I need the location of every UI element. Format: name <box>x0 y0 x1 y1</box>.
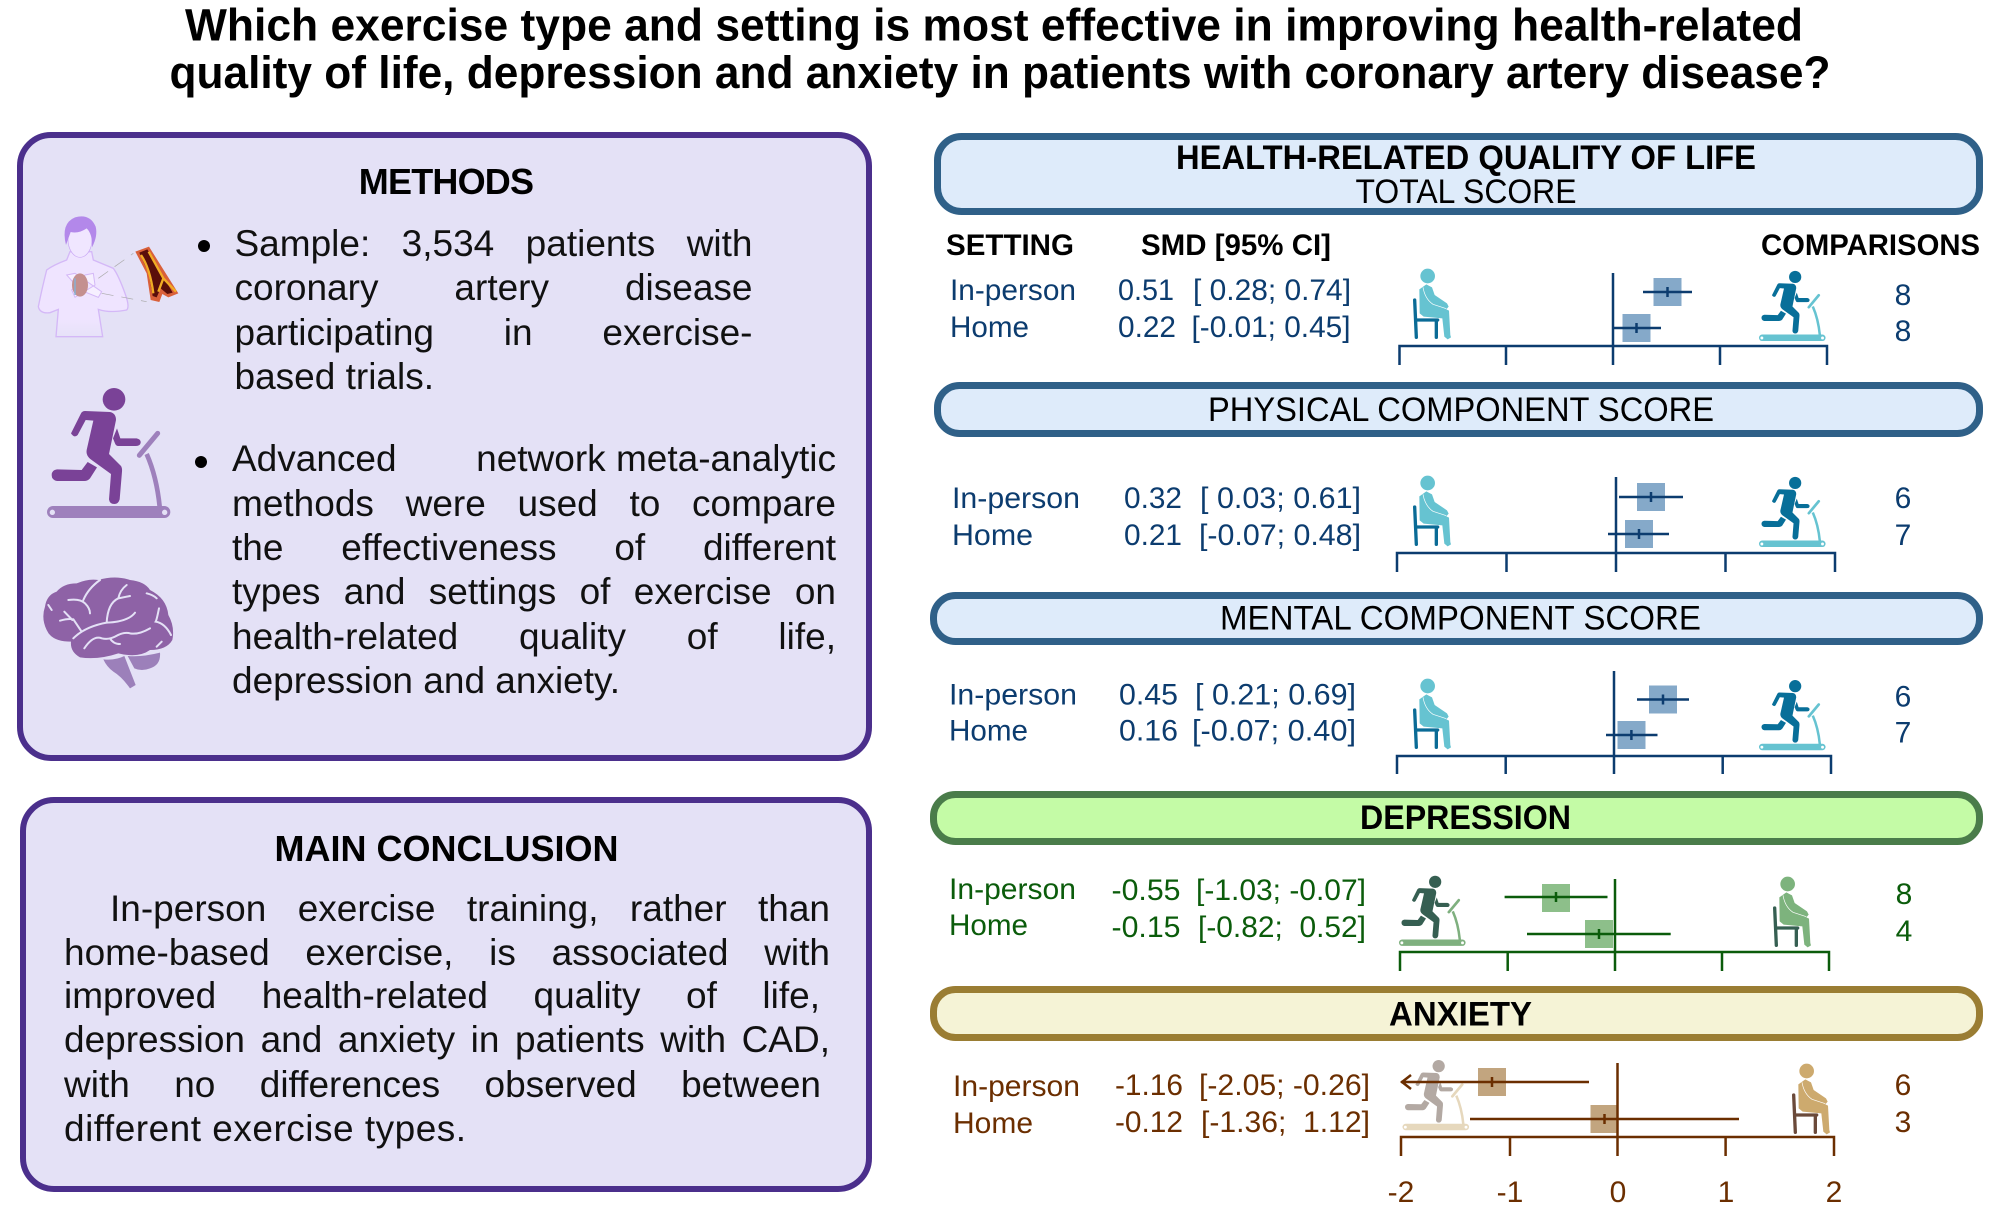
data rows: In-person <box>952 482 1080 515</box>
data rows: [ 0.21; 0.69] <box>1195 678 1356 712</box>
methods heading: METHODS <box>359 160 533 202</box>
header: health-related quality of life <box>938 136 1980 212</box>
bullet marker 2 <box>195 456 207 468</box>
data rows: -0.55 <box>1112 874 1180 907</box>
icon: seated person <box>1415 679 1451 749</box>
text: conclusion: with no differences observed between <box>64 1064 821 1105</box>
data rows: [-0.82; 0.52] <box>1198 911 1366 944</box>
data rows: 4 <box>1896 915 1912 948</box>
header: depression <box>934 794 1980 842</box>
text: methods description: depression and anxiety. <box>232 660 620 700</box>
axis labels <box>1388 1176 1842 1209</box>
header: physical component score: PHYSICAL COMPONENT SCORE <box>1208 391 1714 429</box>
column headings: SMD [95% CI] <box>1141 229 1331 262</box>
data rows: [-0.07; 0.40] <box>1192 714 1356 748</box>
text: methods description: methods were used to compare <box>232 482 836 524</box>
data rows: [ 0.03; 0.61] <box>1200 482 1361 515</box>
data rows <box>950 274 1911 348</box>
data rows: In-person <box>949 678 1077 712</box>
text: sample description: Sample: 3,534 patients with <box>234 223 752 264</box>
data rows: 6 <box>1895 680 1911 714</box>
text: sample description: based trials. <box>234 356 434 397</box>
data rows: 3 <box>1895 1106 1911 1139</box>
text: conclusion: depression and anxiety in patients with CAD, <box>64 1019 830 1060</box>
data rows: [-1.36; 1.12] <box>1201 1106 1370 1139</box>
header: anxiety: ANXIETY <box>1389 996 1532 1034</box>
icon: person on treadmill <box>47 388 170 518</box>
forest plot <box>1400 879 1829 971</box>
header: physical component score <box>938 386 1980 434</box>
panel: health-related quality of life total score <box>938 136 1980 365</box>
icon: seated person <box>1775 877 1811 947</box>
text: methods description: types and settings of exercise on <box>232 570 836 612</box>
forest plot <box>1401 1063 1834 1156</box>
icon: treadmill runner <box>1759 271 1826 341</box>
header: mental component score: MENTAL COMPONENT SCORE <box>1220 600 1701 638</box>
axis labels: 1 <box>1718 1176 1734 1209</box>
icon: seated person <box>1415 476 1451 546</box>
text: methods description <box>232 438 836 700</box>
data rows <box>952 482 1911 552</box>
text: sample description: coronary artery disease <box>234 267 752 308</box>
icon: treadmill runner <box>1759 680 1826 750</box>
data rows: 7 <box>1895 519 1911 552</box>
data rows: [ 0.28; 0.74] <box>1193 274 1351 307</box>
text: conclusion: different exercise types. <box>64 1108 467 1149</box>
column headings: COMPARISONS <box>1761 229 1980 262</box>
data rows: In-person <box>949 873 1076 906</box>
text: methods description: the effectiveness of different <box>232 526 836 568</box>
data rows: -0.15 <box>1112 911 1180 944</box>
panel: physical component score <box>938 386 1980 572</box>
text: conclusion: home-based exercise, is associated with <box>64 932 830 973</box>
data rows: 6 <box>1895 482 1911 515</box>
data rows: [-1.03; -0.07] <box>1196 874 1366 907</box>
data rows: [-0.07; 0.48] <box>1199 519 1361 552</box>
axis labels: -1 <box>1497 1176 1523 1209</box>
data rows: In-person <box>950 274 1076 307</box>
bullet marker 1 <box>198 240 210 252</box>
header: depression: DEPRESSION <box>1360 799 1571 837</box>
data rows <box>949 678 1911 750</box>
icon: seated person <box>1794 1064 1830 1134</box>
forest plot <box>1397 477 1835 572</box>
axis labels: -2 <box>1388 1176 1414 1209</box>
data rows: 8 <box>1896 878 1912 911</box>
data rows: 0.32 <box>1124 482 1182 515</box>
forest plot <box>1397 671 1831 774</box>
panel: mental component score <box>934 596 1980 774</box>
data rows: 0.16 <box>1119 714 1178 748</box>
panel: anxiety <box>934 990 1980 1209</box>
axis labels: 2 <box>1826 1176 1842 1209</box>
data rows: 0.21 <box>1124 519 1182 552</box>
icon: patient with chest pain and artery <box>38 216 178 338</box>
text: conclusion <box>64 888 830 1149</box>
title <box>170 0 1830 98</box>
data rows: In-person <box>953 1070 1080 1103</box>
text: methods description: Advanced <box>232 438 397 478</box>
data rows: 6 <box>1895 1069 1911 1102</box>
data rows <box>953 1069 1911 1140</box>
results column <box>930 133 1983 1209</box>
data rows: 7 <box>1895 716 1911 750</box>
title: quality of life, depression and anxiety in patients with coronary artery disease? <box>170 47 1830 98</box>
icon: brain <box>43 578 174 688</box>
icon: treadmill runner <box>1759 477 1826 547</box>
data rows: Home <box>953 1107 1033 1140</box>
data rows: Home <box>950 311 1029 344</box>
data rows: Home <box>949 909 1028 942</box>
icon: seated person <box>1415 269 1451 339</box>
header: health-related quality of life: TOTAL SCORE <box>1356 173 1576 211</box>
text: sample description <box>234 223 752 397</box>
text: methods description: network meta-analytic <box>476 438 836 478</box>
text: sample description: participating in exercise- <box>234 312 752 353</box>
icon: treadmill runner <box>1399 876 1466 946</box>
data rows: 8 <box>1895 315 1911 348</box>
panel: depression <box>934 794 1980 971</box>
text: methods description: health-related quality of life, <box>232 616 836 656</box>
conclusion heading: MAIN CONCLUSION <box>274 828 618 869</box>
data rows: Home <box>949 714 1028 748</box>
data rows: 0.22 <box>1118 311 1176 344</box>
data rows <box>949 873 1912 948</box>
header: anxiety <box>934 990 1980 1038</box>
column headings <box>946 229 1980 262</box>
title: Which exercise type and setting is most effective in improving health-related <box>185 0 1803 50</box>
header: health-related quality of life: HEALTH-RELATED QUALITY OF LIFE <box>1176 139 1756 177</box>
panel: methods <box>17 132 872 761</box>
header: mental component score <box>934 596 1980 642</box>
data rows: -1.16 <box>1115 1069 1183 1102</box>
forest plot <box>1400 273 1827 365</box>
data rows: 0.51 <box>1118 274 1174 307</box>
column headings: SETTING <box>946 229 1074 262</box>
data rows: 8 <box>1895 279 1911 312</box>
text: conclusion: improved health-related quality of life, <box>64 975 820 1016</box>
icon: treadmill runner <box>1402 1060 1469 1130</box>
data rows: -0.12 <box>1115 1106 1183 1139</box>
data rows: [-2.05; -0.26] <box>1199 1069 1370 1102</box>
panel: main conclusion <box>20 797 872 1192</box>
axis labels: 0 <box>1610 1176 1626 1209</box>
text: conclusion: In-person exercise training, rather than <box>110 888 830 929</box>
data rows: Home <box>952 519 1033 552</box>
data rows: [-0.01; 0.45] <box>1192 311 1350 344</box>
data rows: 0.45 <box>1119 678 1178 712</box>
